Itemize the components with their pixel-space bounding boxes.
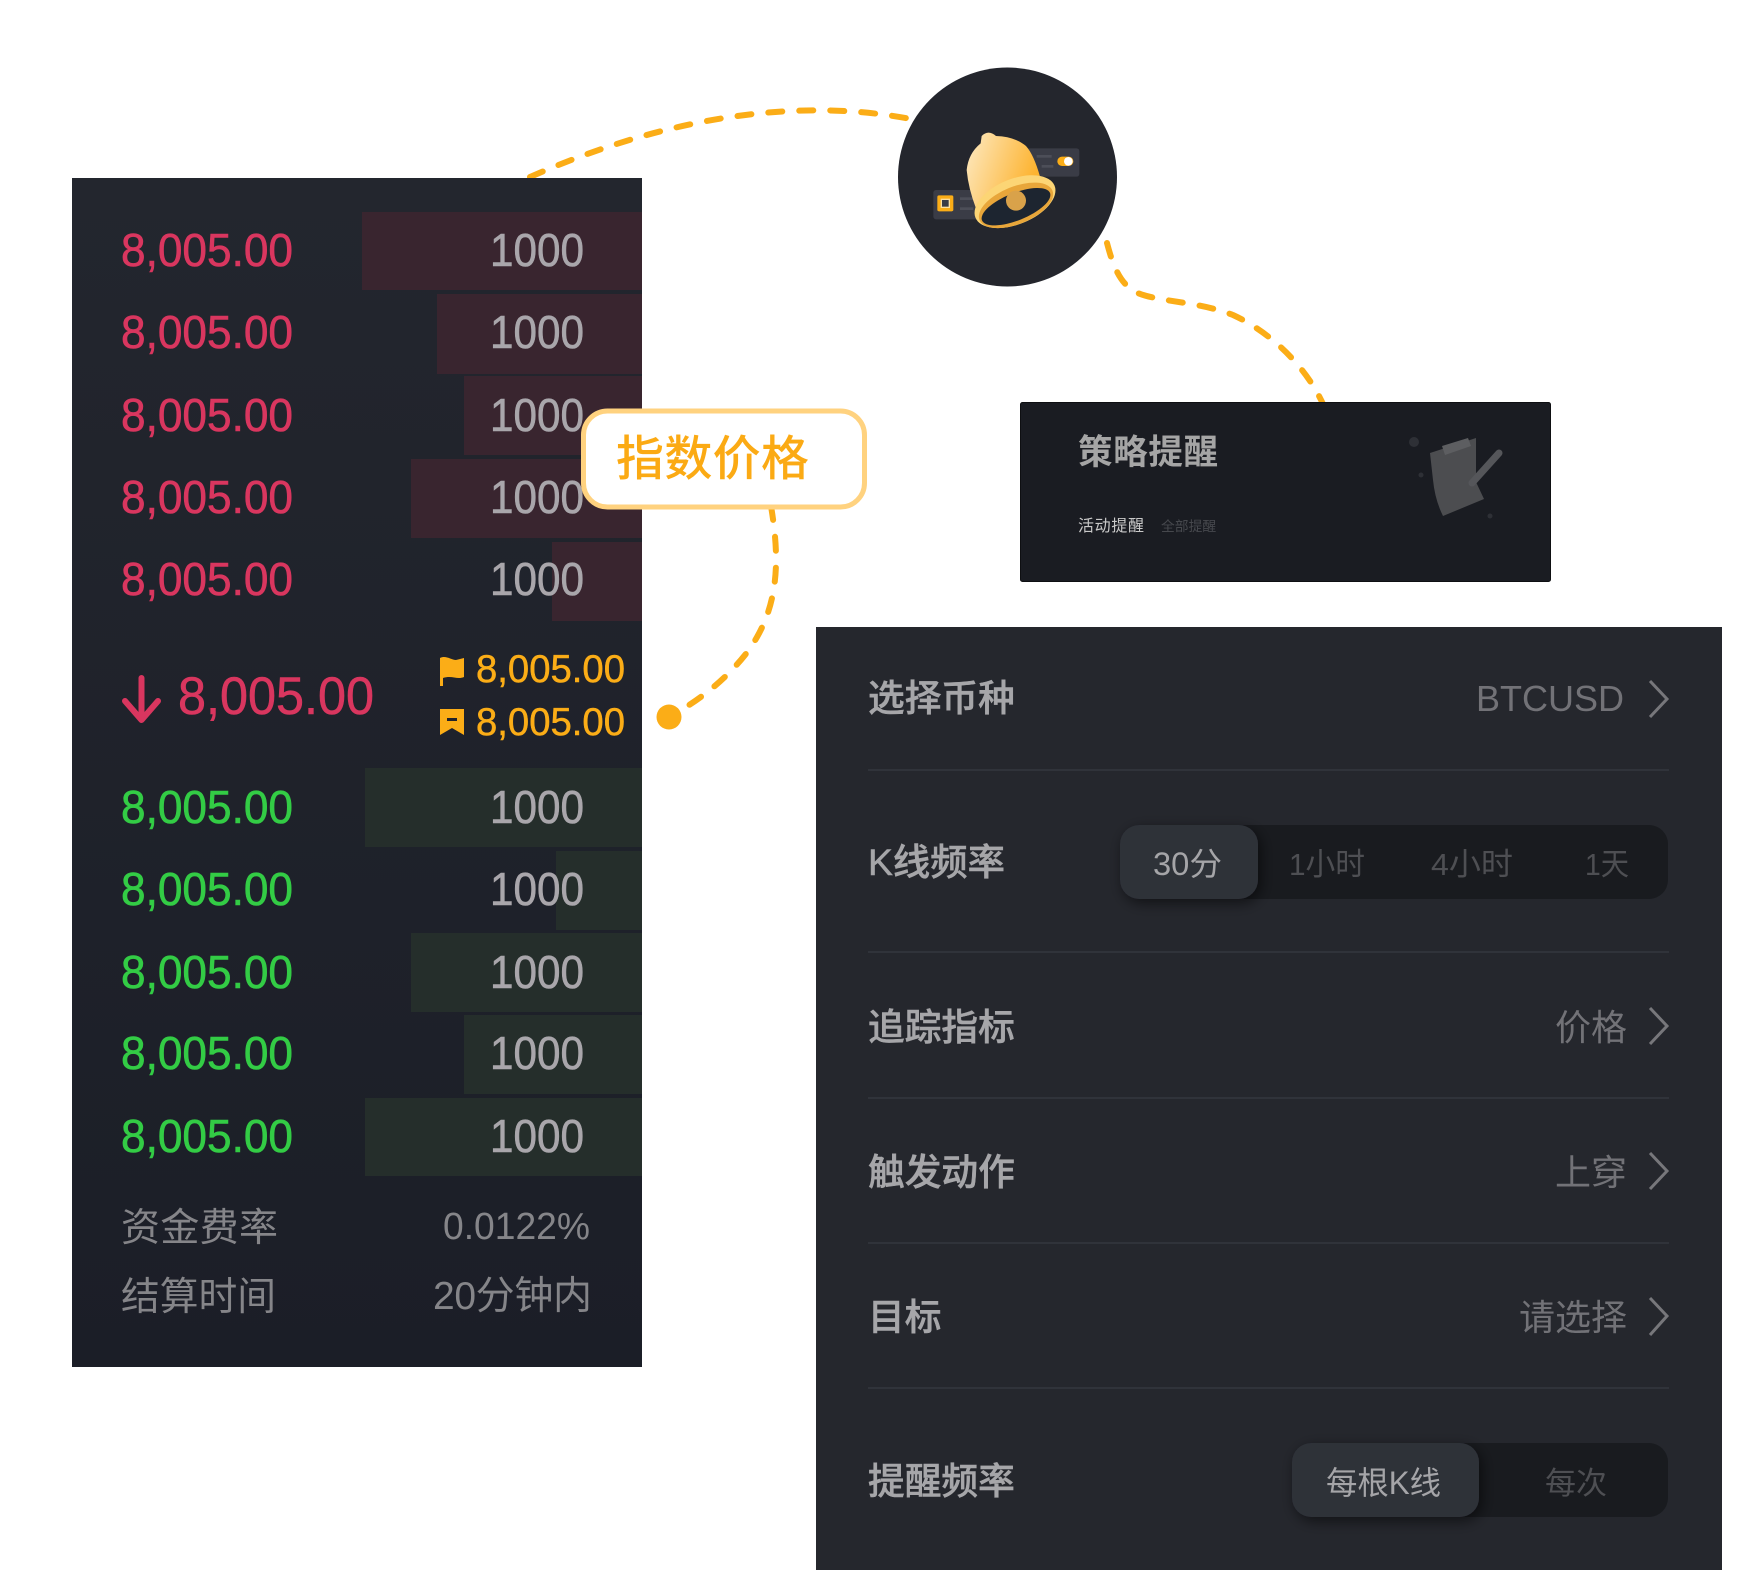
bid prices: 8,005.00 bbox=[121, 946, 293, 998]
active tab: 活动提醒 bbox=[1078, 517, 1144, 535]
inactive tab: 全部提醒 bbox=[1161, 518, 1216, 534]
funding rate bbox=[121, 1206, 590, 1250]
bid prices: 8,005.00 bbox=[121, 863, 293, 915]
row: target: 目标 bbox=[868, 1297, 941, 1338]
icon: clipboard and pen bbox=[1409, 437, 1499, 518]
dashed connector: panel to bell bbox=[530, 110, 925, 177]
ask quantities: 1000 bbox=[490, 389, 584, 441]
card left with checkbox bbox=[933, 190, 983, 219]
ask quantities: 1000 bbox=[490, 471, 584, 523]
selected frequency bbox=[1292, 1443, 1479, 1517]
callout: index price: 指数价格 bbox=[616, 433, 809, 486]
row: alert frequency bbox=[868, 1443, 1668, 1517]
selected frequency: 每根K线 bbox=[1326, 1465, 1441, 1501]
connector dot bbox=[656, 704, 682, 730]
panel: strategy reminder card bbox=[1020, 402, 1550, 582]
row: trigger action bbox=[868, 1152, 1667, 1193]
bid prices: 8,005.00 bbox=[121, 781, 293, 833]
row: symbol: BTCUSD bbox=[1476, 678, 1624, 719]
mark price: 8,005.00 bbox=[476, 648, 625, 691]
dashed connector: bell to strategy card bbox=[1107, 243, 1323, 404]
card title: 策略提醒 bbox=[1078, 434, 1218, 472]
funding rate: 资金费率 bbox=[121, 1207, 278, 1250]
interval options: 1小时 bbox=[1289, 847, 1365, 882]
bid depth bars bbox=[365, 768, 642, 1176]
ask prices: 8,005.00 bbox=[121, 306, 293, 358]
bell body bbox=[967, 133, 1040, 208]
interval options: 4小时 bbox=[1431, 847, 1513, 882]
callout: index price bbox=[584, 411, 864, 507]
bid quantities: 1000 bbox=[490, 946, 584, 998]
panel: alert settings bbox=[816, 627, 1722, 1570]
index price: 8,005.00 bbox=[476, 701, 625, 744]
bid prices bbox=[121, 781, 293, 1162]
bid quantities: 1000 bbox=[490, 863, 584, 915]
row: trigger action: 触发动作 bbox=[868, 1152, 1015, 1193]
dashed connector: callout to dot bbox=[669, 506, 776, 717]
row: K-line interval bbox=[868, 825, 1668, 899]
bid quantities: 1000 bbox=[490, 1027, 584, 1079]
bid quantities: 1000 bbox=[490, 781, 584, 833]
ask prices bbox=[121, 224, 293, 605]
interval options: 1天 bbox=[1585, 847, 1629, 882]
bell rim bbox=[967, 165, 1063, 239]
row: tracked indicator bbox=[868, 1007, 1667, 1048]
interval options bbox=[1289, 847, 1629, 882]
frequency option: 每次 bbox=[1545, 1466, 1607, 1501]
row: target: 请选择 bbox=[1519, 1297, 1627, 1338]
settlement time bbox=[121, 1275, 592, 1319]
row: symbol bbox=[868, 678, 1667, 719]
settlement time: 结算时间 bbox=[121, 1276, 276, 1319]
ask depth bars bbox=[362, 212, 642, 621]
ask quantities: 1000 bbox=[490, 553, 584, 605]
icon: bell badge bbox=[898, 68, 1117, 286]
bid quantities: 1000 bbox=[490, 1110, 584, 1162]
card right with toggle bbox=[1027, 148, 1079, 177]
row: alert frequency: 提醒频率 bbox=[868, 1461, 1015, 1502]
panel: order book bbox=[72, 178, 642, 1367]
ask prices: 8,005.00 bbox=[121, 553, 293, 605]
ask prices: 8,005.00 bbox=[121, 224, 293, 276]
row: trigger action: 上穿 bbox=[1555, 1152, 1627, 1193]
bid prices: 8,005.00 bbox=[121, 1110, 293, 1162]
funding rate: 0.0122% bbox=[443, 1206, 590, 1248]
bid quantities bbox=[490, 781, 584, 1162]
icon: bookmark bbox=[440, 709, 464, 735]
row: symbol: 选择币种 bbox=[868, 678, 1015, 719]
bid prices: 8,005.00 bbox=[121, 1027, 293, 1079]
selected interval bbox=[1120, 825, 1258, 899]
bell clapper bbox=[1006, 191, 1026, 211]
row: tracked indicator: 价格 bbox=[1555, 1007, 1627, 1048]
ask prices: 8,005.00 bbox=[121, 471, 293, 523]
settlement time: 20分钟内 bbox=[433, 1275, 592, 1318]
ask quantities: 1000 bbox=[490, 224, 584, 276]
row: target bbox=[868, 1297, 1667, 1338]
row: K-line interval: K线频率 bbox=[868, 842, 1005, 883]
icon: down arrow bbox=[125, 678, 158, 720]
ask quantities: 1000 bbox=[490, 306, 584, 358]
ask quantities bbox=[490, 224, 584, 605]
icon: flag bbox=[440, 657, 464, 686]
selected interval: 30分 bbox=[1153, 846, 1222, 882]
last price: 8,005.00 bbox=[178, 667, 374, 726]
ask prices: 8,005.00 bbox=[121, 389, 293, 441]
row: tracked indicator: 追踪指标 bbox=[868, 1007, 1015, 1048]
